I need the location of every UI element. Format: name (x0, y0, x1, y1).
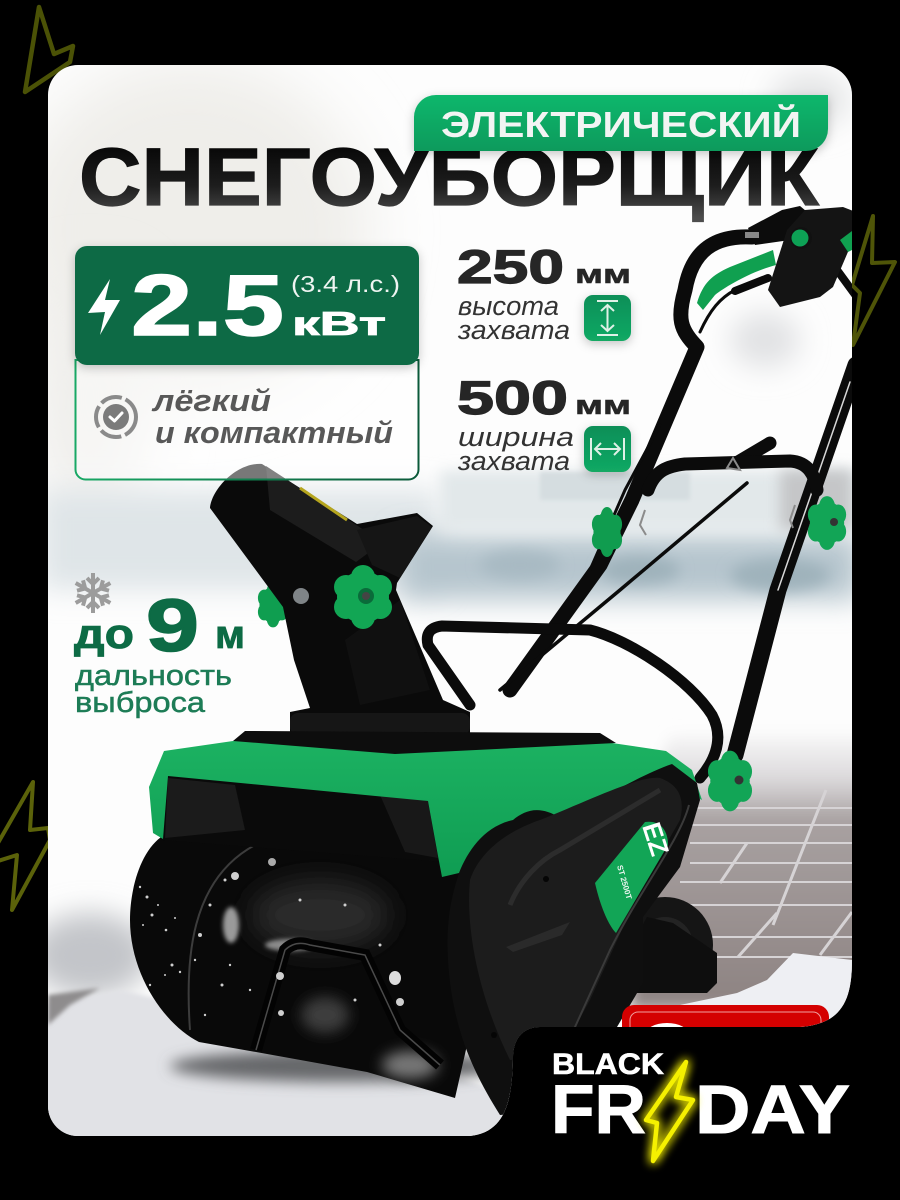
icon: neon lightning (646, 1062, 693, 1161)
snow speckles (139, 872, 404, 1016)
icon: snowflake (73, 573, 113, 613)
knob: left handle (592, 507, 622, 557)
throw distance: выброса (75, 687, 206, 719)
icon: height arrow (584, 295, 631, 341)
motor block (633, 917, 717, 993)
black friday tag: FR (551, 1071, 646, 1148)
housing underside cavity (163, 776, 438, 858)
black friday tag: DAY (695, 1071, 850, 1148)
black friday tag (551, 1048, 850, 1161)
foreground snow (48, 986, 510, 1136)
knob: chute (334, 565, 392, 629)
control box (768, 207, 856, 307)
throw distance: м (215, 613, 245, 657)
brand label: EZ (636, 819, 675, 860)
discharge chute (210, 464, 470, 735)
power value: 2.5 (131, 258, 284, 354)
plug and cable (745, 206, 805, 245)
red sticker (622, 1005, 829, 1027)
throw distance: дальность (75, 660, 232, 692)
knob: lower handle (708, 751, 752, 811)
spec: height: мм (575, 259, 631, 289)
throw distance (73, 573, 245, 719)
spec: width: мм (575, 390, 631, 420)
subtitle badge (414, 95, 828, 151)
rear wheel (643, 897, 713, 950)
spec: width: ширина (458, 422, 574, 452)
black friday tag: BLACK (552, 1048, 664, 1081)
spec: height (457, 240, 631, 345)
icon: width arrow (584, 426, 631, 472)
power header (75, 246, 419, 365)
snow blower (130, 206, 856, 1115)
spec: width: захвата (457, 446, 570, 476)
icon: check badge (96, 397, 136, 437)
brand label (595, 822, 669, 933)
green housing (149, 741, 702, 885)
knob: behind chute (258, 586, 286, 628)
feature text: лёгкий (151, 383, 271, 418)
side plate (447, 764, 700, 1115)
power panel (75, 246, 419, 480)
unit: кВт (292, 305, 386, 342)
paved path (630, 735, 870, 1030)
subtitle badge: ЭЛЕКТРИЧЕСКИЙ (441, 103, 801, 145)
neon bolt: right (852, 216, 895, 345)
snow mound (680, 953, 852, 1030)
auger drum (130, 835, 500, 1098)
neon bolt: lower left (0, 782, 50, 910)
top plate (233, 731, 616, 754)
knob: right handle (808, 496, 846, 550)
spec: width (457, 371, 631, 476)
power panel: и компактный (155, 415, 393, 450)
icon: lightning (88, 279, 120, 335)
throw distance: до (74, 610, 134, 657)
title: СНЕГОУБОРЩИК (79, 132, 820, 223)
main handle tubes (427, 237, 856, 778)
spec: height: захвата (457, 315, 570, 345)
horsepower: (3.4 л.с.) (291, 271, 400, 297)
neon bolt: top left (25, 7, 73, 92)
brand label: ST 2500T (615, 864, 633, 900)
spec: height: высота (458, 291, 559, 321)
hinge clips (640, 458, 795, 535)
panel outline (76, 360, 418, 480)
green lever grip (697, 250, 776, 310)
spec: height: 250 (457, 240, 564, 293)
throw distance: 9 (146, 584, 199, 667)
spec: width: 500 (457, 371, 568, 424)
